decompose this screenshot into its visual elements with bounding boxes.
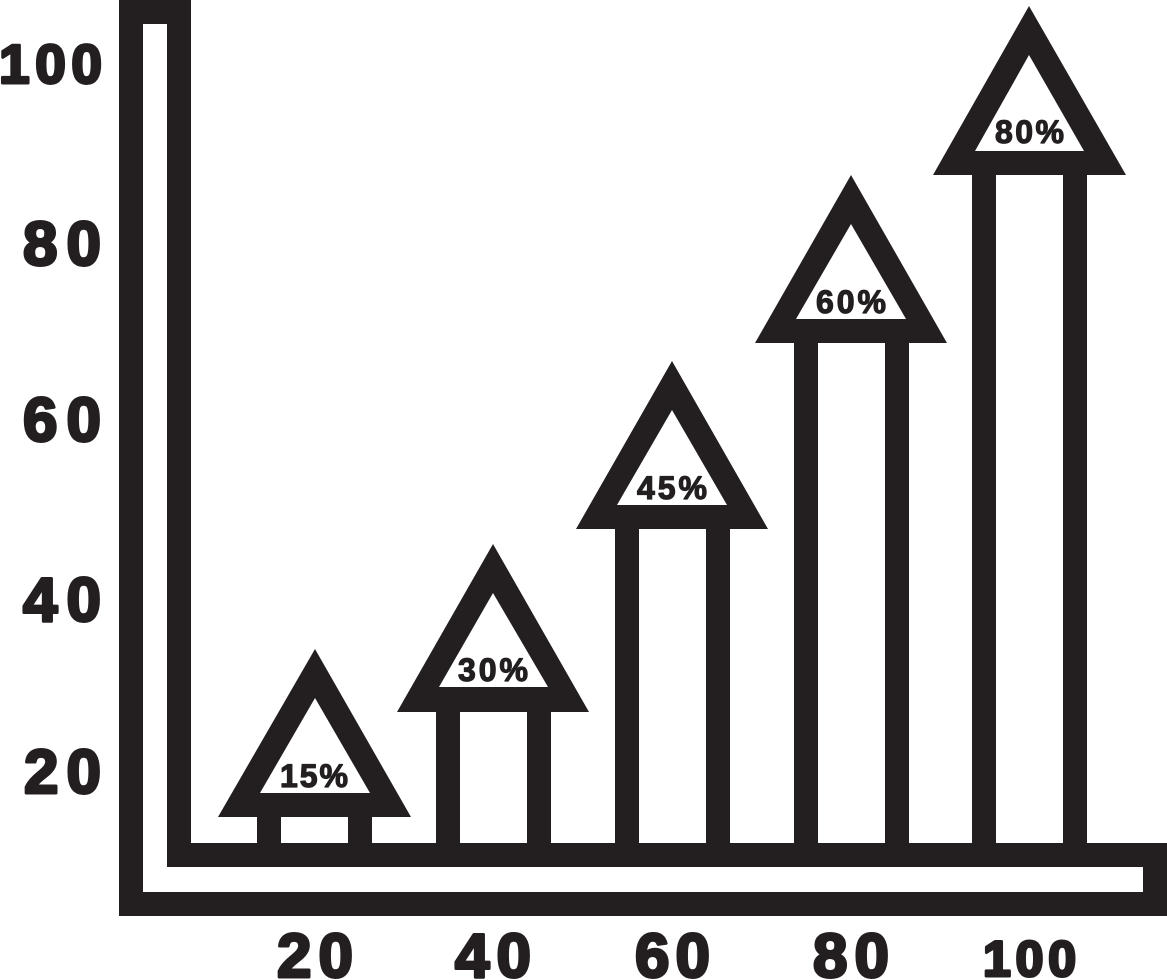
y axis labels: 60 — [23, 386, 101, 455]
arrow: 45% — [576, 361, 768, 843]
arrow: 60%: 60% — [816, 284, 886, 320]
y axis labels: 80 — [23, 210, 101, 279]
y axis labels: 100 — [0, 33, 102, 95]
arrow: 80%: 80% — [995, 114, 1064, 150]
y axis labels — [0, 33, 102, 807]
x axis labels — [277, 922, 1076, 980]
arrow: 80% — [933, 6, 1126, 843]
arrow: 45%: 45% — [637, 470, 707, 506]
arrow: 30% — [397, 544, 589, 843]
y axis labels: 40 — [23, 566, 101, 635]
arrow: 15%: 15% — [280, 758, 348, 794]
arrow: 15% — [218, 649, 411, 843]
arrow: 60% — [755, 175, 947, 843]
y axis labels: 20 — [24, 738, 101, 807]
arrow: 30%: 30% — [458, 652, 528, 688]
